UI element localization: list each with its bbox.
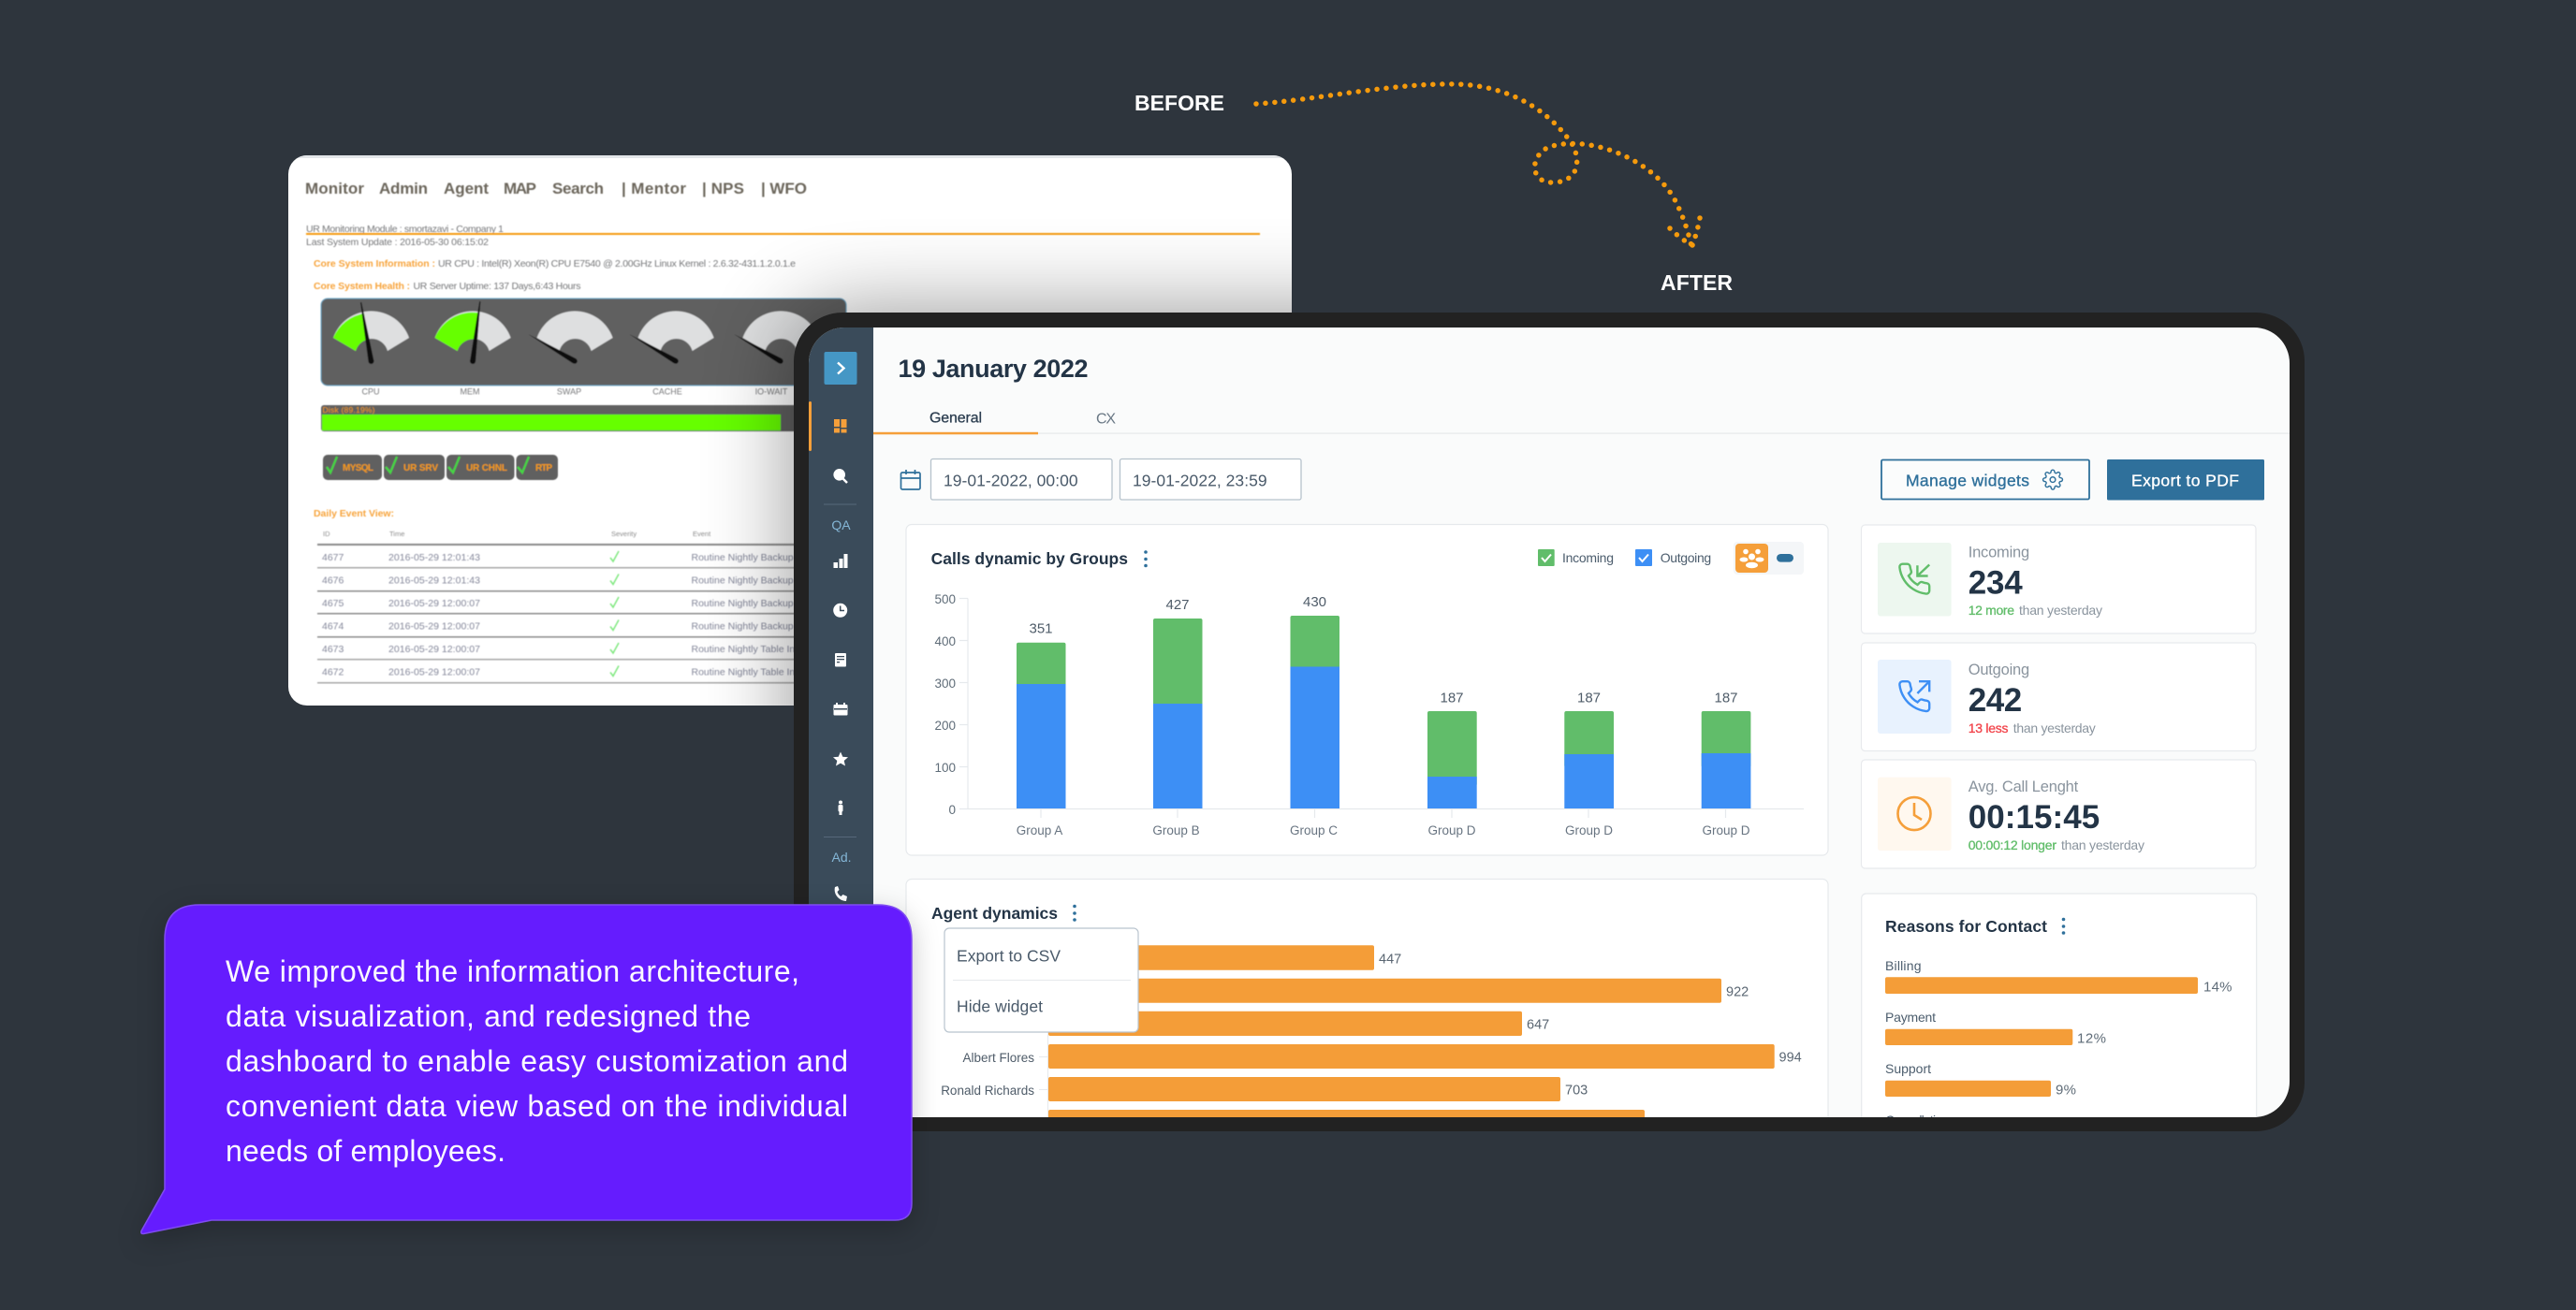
stat card: incoming: than yesterday (2019, 603, 2102, 618)
panel: agent dynamics (906, 880, 1828, 1160)
stat card: outgoing: Outgoing (1969, 662, 2029, 678)
daily event table: 2016-05-29 12:00:07 (388, 621, 480, 633)
stat card: outgoing: than yesterday (2013, 720, 2096, 735)
tabs (873, 410, 2290, 434)
daily event table: 4673 (322, 644, 344, 655)
daily event table: 4675 (322, 598, 344, 609)
tabs: General (929, 410, 982, 427)
reason: billing: Billing (1885, 958, 1921, 973)
gauge: SWAP (528, 311, 613, 364)
daily event table: 2016-05-29 12:00:07 (388, 598, 480, 609)
reason: payment (1885, 1010, 2106, 1046)
stat card: average call length: 00:00:12 longer (1969, 837, 2056, 852)
legacy module info (306, 224, 1260, 292)
label: after: AFTER (1661, 270, 1733, 295)
stat card: incoming (1861, 525, 2256, 633)
daily event view heading: Daily Event View: (314, 508, 394, 519)
bar: Group D third (1702, 691, 1750, 837)
callout text: needs of employees. (226, 1134, 505, 1168)
daily event table: ID (323, 530, 330, 538)
active item marker (809, 401, 812, 451)
stat card: average call length: than yesterday (2061, 837, 2144, 852)
reason: support (1885, 1061, 2076, 1099)
y axis labels: 300 (934, 677, 956, 691)
gauge labels: CACHE (652, 387, 682, 397)
icon: dashboard (834, 419, 846, 432)
icon: document (835, 653, 846, 666)
horizontal bar chart: Albert Flores (962, 1051, 1034, 1065)
stat card: outgoing: 242 (1969, 682, 2022, 719)
legacy module info: UR CPU : Intel(R) Xeon(R) CPU E7540 @ 2.00GHz Linux Kernel : 2.6.32-431.1.2.0.1.e (438, 258, 796, 269)
y axis labels: 100 (934, 761, 956, 775)
service status buttons: UR SRV (403, 463, 438, 473)
icon: search (833, 469, 847, 483)
gauge: CPU (333, 302, 409, 364)
y axis labels (934, 592, 956, 817)
legend: incoming: Incoming (1562, 550, 1614, 565)
daily event table: Routine Nightly Backup of (691, 598, 804, 609)
disk usage bar: Disk (89.19%) (322, 405, 375, 415)
chart title: Calls dynamic by Groups (931, 549, 1128, 568)
legacy module info: UR Server Uptime: 137 Days,6:43 Hours (414, 281, 580, 292)
legacy navigation menu: | Mentor (622, 180, 686, 197)
gauge labels: MEM (461, 387, 479, 397)
widget title: Reasons for Contact (1885, 917, 2047, 936)
bar: Group D: Group D (1427, 823, 1476, 837)
daily event table (317, 530, 842, 683)
daily event table: 4672 (322, 666, 344, 677)
menu dots (2062, 918, 2065, 935)
bar: Group D: 187 (1440, 691, 1464, 706)
bar: Group A: 351 (1029, 621, 1053, 636)
gauge labels (361, 387, 788, 395)
daily event table: 2016-05-29 12:00:07 (388, 666, 480, 677)
reason: support: 9% (2056, 1082, 2076, 1099)
stat card: average call length (1861, 760, 2256, 868)
daily event table: Routine Nightly Backup of (691, 575, 804, 586)
panel: reasons for contact (1862, 894, 2257, 1174)
service status buttons: RTP (535, 463, 552, 473)
legend: outgoing (1635, 549, 1711, 566)
date range inputs: 19-01-2022, 23:59 (1133, 472, 1267, 490)
horizontal bar chart: 922 (1726, 984, 1749, 999)
horizontal bar chart: 447 (1379, 953, 1401, 968)
legend: incoming (1538, 549, 1614, 566)
bar: Group D third: Group D (1702, 823, 1750, 837)
legend: outgoing: Outgoing (1661, 550, 1711, 565)
y axis labels: 400 (934, 634, 956, 648)
callout text: convenient data view based on the individual (226, 1089, 848, 1123)
legacy navigation menu: | NPS (702, 180, 744, 197)
legacy navigation menu: MAP (504, 180, 536, 197)
y axis labels: 500 (934, 592, 956, 606)
legacy module info: UR Monitoring Module : smortazavi - Company 1 (306, 224, 504, 235)
date range inputs (930, 458, 1301, 500)
callout text: We improved the information architecture, (226, 954, 799, 988)
dropdown menu (944, 928, 1138, 1032)
stat card: average call length: Avg. Call Lenght (1969, 779, 2079, 795)
callout: redesign summary (141, 905, 912, 1234)
service status buttons (323, 455, 558, 480)
bar: Group D second: Group D (1565, 823, 1613, 837)
icon: incoming call (1899, 564, 1929, 594)
view toggle (1734, 542, 1804, 575)
menu dots (1144, 550, 1148, 567)
icon: clock (833, 604, 847, 618)
icon: calendar (833, 703, 848, 715)
legacy module info: Last System Update : 2016-05-30 06:15:02 (306, 237, 489, 248)
daily event table: Time (389, 530, 404, 538)
gauge: IO-WAIT (734, 311, 818, 364)
tabs: CX (1096, 412, 1116, 427)
horizontal bar chart (941, 936, 1802, 1134)
icon: phone (835, 886, 847, 901)
bar: Group D second (1564, 691, 1614, 837)
daily event table: Routine Nightly Backup of (691, 552, 804, 563)
gauge: CACHE (629, 311, 714, 364)
stat card: outgoing: 13 less (1969, 720, 2009, 735)
daily event table: 4676 (322, 575, 344, 586)
icon: outgoing call (1899, 681, 1929, 711)
legacy navigation menu: Search (552, 180, 604, 197)
label: before: BEFORE (1134, 91, 1224, 115)
date heading: 19 January 2022 (899, 355, 1088, 383)
daily event table: Severity (611, 530, 637, 538)
bar: Group D (1427, 691, 1477, 837)
daily event table: Event (693, 530, 711, 538)
button: manage widgets: Manage widgets (1906, 472, 2029, 490)
legacy navigation menu (305, 180, 807, 197)
button: export to PDF (2107, 459, 2264, 500)
horizontal bar chart: 647 (1527, 1018, 1549, 1033)
stacked bar chart (934, 592, 1804, 837)
daily event table: Routine Nightly Table Integrity (691, 644, 823, 655)
button: export to PDF: Export to PDF (2131, 472, 2239, 490)
reason: cancellation: Cancellation (1885, 1113, 1949, 1128)
daily event table: Routine Nightly Table Integrity (691, 666, 823, 677)
dropdown menu: Hide widget (957, 997, 1043, 1016)
daily event table: 4677 (322, 552, 344, 563)
legacy navigation menu: | WFO (761, 180, 807, 197)
legacy module info: Core System Health : (314, 281, 410, 292)
stat card: average call length: 00:15:45 (1969, 799, 2100, 836)
callout text (226, 954, 848, 1168)
icon: clock (1898, 797, 1930, 830)
bar: Group A (1017, 621, 1065, 837)
bar: Group B: 427 (1165, 597, 1190, 613)
callout text: data visualization, and redesigned the (226, 999, 751, 1033)
icon: person (839, 801, 842, 815)
reason: billing: 14% (2203, 979, 2232, 996)
icon: star (833, 752, 848, 765)
date range inputs: 19-01-2022, 00:00 (944, 472, 1078, 490)
bar: Group C: 430 (1303, 594, 1326, 610)
reason: support: Support (1885, 1061, 1931, 1076)
Ad section label: Ad. (831, 850, 852, 865)
bar: Group C: Group C (1290, 823, 1338, 837)
panel: calls dynamic by groups (906, 524, 1828, 855)
gauge labels: SWAP (557, 387, 581, 397)
button: manage widgets (1881, 460, 2089, 500)
callout text: dashboard to enable easy customization and (226, 1044, 848, 1078)
daily event table: Routine Nightly Backup of (691, 621, 804, 633)
sidebar toggle button (824, 352, 857, 385)
disk usage bar (321, 405, 847, 431)
stat card: incoming: 12 more (1969, 603, 2014, 618)
stat card: incoming: 234 (1969, 565, 2023, 602)
QA section label: QA (831, 517, 851, 532)
bar: Group D third: 187 (1714, 691, 1738, 706)
reason: payment: Payment (1885, 1010, 1936, 1025)
horizontal bar chart: 994 (1778, 1050, 1802, 1065)
service status buttons: UR CHNL (466, 463, 507, 473)
sidebar navigation (809, 328, 873, 904)
icon: calendar picker (900, 470, 920, 489)
reason: payment: 12% (2077, 1031, 2106, 1046)
widget title: Agent dynamics (931, 904, 1058, 923)
gauge labels: IO-WAIT (755, 387, 788, 397)
menu dots (1073, 905, 1076, 922)
bar: Group B (1152, 597, 1202, 837)
gauge labels: CPU (361, 387, 380, 397)
panel: legacy monitoring screen (288, 155, 1761, 1033)
device frame: redesigned dashboard (794, 313, 2305, 1174)
legacy navigation menu: Monitor (305, 180, 364, 197)
reason: billing (1885, 958, 2232, 996)
stat card: incoming: Incoming (1969, 545, 2029, 561)
y axis labels: 200 (934, 719, 956, 733)
y axis labels: 0 (948, 803, 956, 817)
daily event table: 2016-05-29 12:00:07 (388, 644, 480, 655)
daily event table: 2016-05-29 12:01:43 (388, 575, 480, 586)
daily event table: 4674 (322, 621, 344, 633)
horizontal bar chart: Ronald Richards (941, 1084, 1034, 1098)
icon: bar chart (833, 554, 848, 568)
arrow: dotted looping arrow from before to after (1256, 84, 1700, 250)
legacy navigation menu: Admin (379, 180, 428, 197)
bar: Group A: Group A (1017, 823, 1062, 837)
gauges panel (321, 298, 846, 386)
dropdown menu: Export to CSV (957, 947, 1061, 966)
daily event table: 2016-05-29 12:01:43 (388, 552, 480, 563)
bar: Group C (1290, 594, 1339, 837)
service status buttons: MYSQL (343, 463, 373, 473)
legacy navigation menu: Agent (444, 180, 489, 197)
bar: Group D second: 187 (1577, 691, 1601, 706)
gauge: MEM (435, 301, 511, 364)
legacy module info: Core System Information : (314, 258, 435, 269)
stat card: outgoing (1861, 643, 2256, 750)
horizontal bar chart: 703 (1565, 1084, 1588, 1099)
bar: Group B: Group B (1152, 823, 1200, 837)
